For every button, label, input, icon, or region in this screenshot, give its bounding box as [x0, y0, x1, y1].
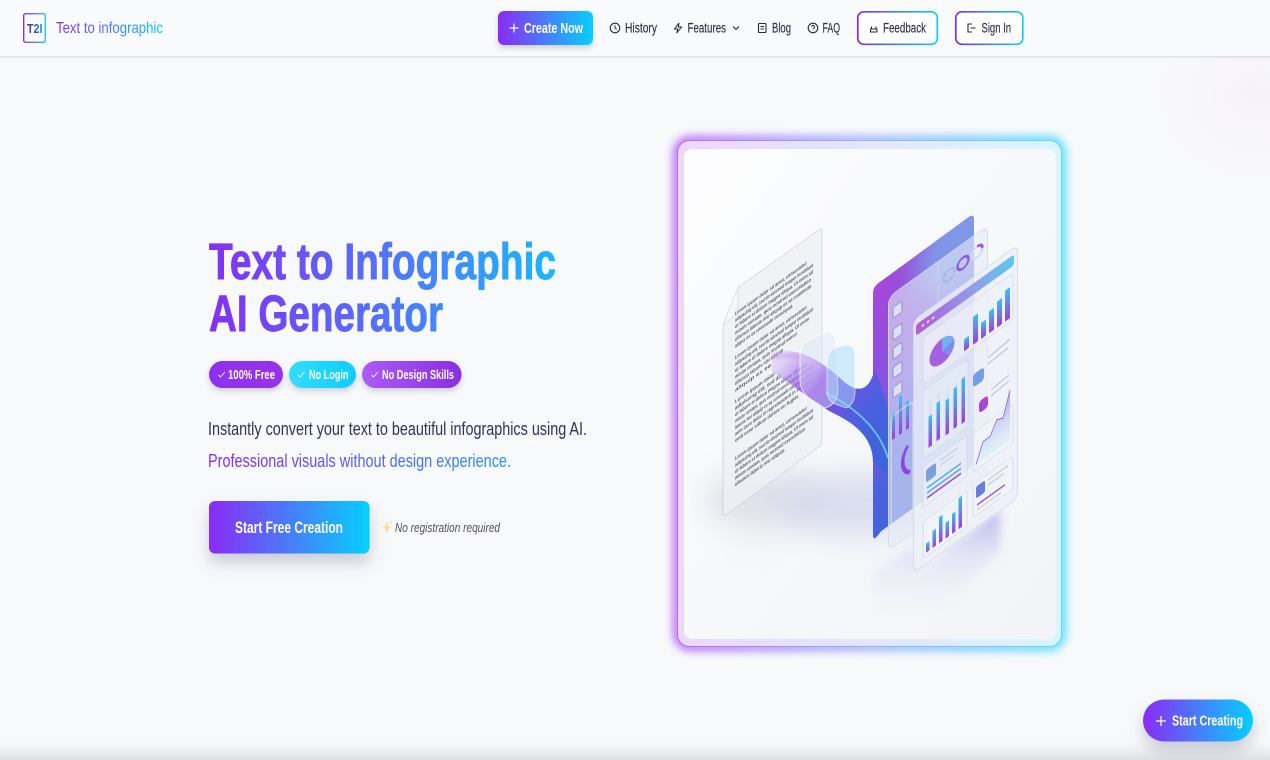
- ring icons: [944, 242, 982, 285]
- logo: [24, 14, 163, 42]
- document text: ut labore et dolore magna aliqua. Ut enim ad: [735, 269, 813, 330]
- document text: minim veniam, quis nostrud exercitation: [735, 427, 805, 482]
- document text: minim veniam, quis nostrud exerci: [735, 331, 797, 381]
- card frame: [678, 140, 1062, 646]
- document text: minim veniam, quis nostrud exercitation ullamco: [735, 364, 813, 425]
- logo: Text to infographic: [56, 20, 163, 37]
- floor shadows and reflections: [705, 468, 1000, 632]
- create now button: [498, 11, 593, 45]
- faq link: FAQ: [822, 20, 840, 36]
- hero title: [209, 233, 556, 342]
- ring gauge: [903, 444, 910, 477]
- document text: laboris nisi aliquip ex ea commodo consequat duis: [735, 370, 813, 431]
- hero title: Text to Infographic: [209, 233, 556, 290]
- sign in button: [956, 12, 1023, 44]
- document text: adipiscing elit, sed do: [735, 374, 781, 412]
- floating start creating button: Start Creating: [1172, 712, 1243, 730]
- document text: ullamco laboris nisi aliquip: [735, 348, 783, 387]
- purple back panel: [873, 216, 974, 538]
- features link: Features: [688, 20, 726, 36]
- document text: adipiscing elit, sed do eiusmod tempor incididunt: [735, 307, 813, 368]
- document text: ut labore et dolore magna aliqua. Ut enim ad: [735, 414, 813, 475]
- glass rings on tube: [800, 332, 855, 408]
- badge: 100% free: [209, 361, 283, 388]
- data flow tube: [772, 351, 892, 480]
- document text: ullamco laboris nisi aliquip ex ea commodo: [735, 284, 811, 343]
- tall bars card: [923, 358, 968, 459]
- start free creation button: [209, 501, 370, 554]
- blog link: Blog: [772, 20, 791, 36]
- chart card: [923, 273, 1013, 385]
- illustration card: [677, 140, 1062, 647]
- source document: [723, 228, 822, 517]
- document text: adipiscing elit, sed do eiusmod tempor incididunt: [735, 263, 813, 324]
- card image area: [684, 149, 1056, 639]
- description text: Instantly convert your text to beautiful infographics using AI.: [208, 419, 587, 439]
- badge: no login: [289, 361, 356, 388]
- logo: T2I: [27, 22, 42, 36]
- app card: [973, 456, 1013, 518]
- history link: History: [625, 20, 657, 36]
- document text: minim veniam, quis nostrud exercitation: [735, 277, 811, 337]
- history link: [610, 20, 657, 36]
- document text: ut labore et dolore magna aliqua. Ut enim: [735, 362, 807, 418]
- hero title: AI Generator: [209, 285, 443, 342]
- document text: ullamco laboris nisi aliquip.: [735, 447, 785, 488]
- icon: sparkles: [382, 520, 393, 534]
- profile card: [923, 435, 967, 508]
- document text: adipiscing elit, sed do eiusmod tempor incididunt: [735, 408, 813, 469]
- dashboard header: [916, 254, 1014, 336]
- front dashboard panel: [914, 245, 1018, 573]
- icon rows: [973, 339, 1010, 418]
- card glow: [677, 140, 1062, 647]
- blog link: [758, 20, 791, 36]
- column chart: [964, 287, 1010, 351]
- no registration note: No registration required: [395, 521, 501, 535]
- document text: velit esse cillum dolore eu fugiat.: [735, 393, 799, 444]
- pie chart: [930, 330, 954, 373]
- floating start creating button: [1143, 700, 1253, 742]
- line chart card: [973, 388, 1013, 472]
- badge: no design skills: No Design Skills: [382, 367, 454, 382]
- feature badges: [209, 361, 462, 388]
- small bar chart: [892, 390, 909, 440]
- menu icons: [893, 301, 902, 398]
- lower bars card: [923, 490, 967, 559]
- document text: aliqua ex ea commodo consequat.: [735, 303, 793, 350]
- feedback button: [858, 12, 937, 44]
- highlighted description text: Professional visuals without design experience.: [208, 451, 511, 471]
- badge: 100% free: 100% Free: [228, 367, 275, 382]
- document text: Lorem ipsum dolor sit amet, consectetur: [735, 304, 807, 361]
- document text: aute irure dolor in reprehenderit in voluptate: [735, 377, 813, 438]
- document text: Lorem ipsum dolor: [735, 371, 776, 405]
- feedback button: Feedback: [883, 20, 926, 36]
- navigation bar: [0, 0, 1270, 56]
- middle glass panel: [888, 225, 988, 550]
- badge: no design skills: [362, 361, 462, 388]
- no registration note: [382, 520, 501, 535]
- document text: ut labore et dolore magna aliqua. Ut enim: [735, 316, 809, 374]
- sign in button: Sign In: [982, 20, 1011, 36]
- create now button: Create Now: [524, 20, 583, 37]
- faq link: [808, 20, 840, 36]
- document text: Lorem ipsum dolor sit amet, consectetur: [735, 260, 807, 317]
- start free creation button: Start Free Creation: [235, 519, 343, 537]
- document text: Lorem ipsum dolor sit amet, consectetur: [735, 405, 807, 462]
- document text: aliquip ex ea: [735, 362, 772, 394]
- illustration artwork: [704, 216, 1018, 578]
- badge: no login: No Login: [309, 367, 349, 382]
- document text: [735, 256, 813, 488]
